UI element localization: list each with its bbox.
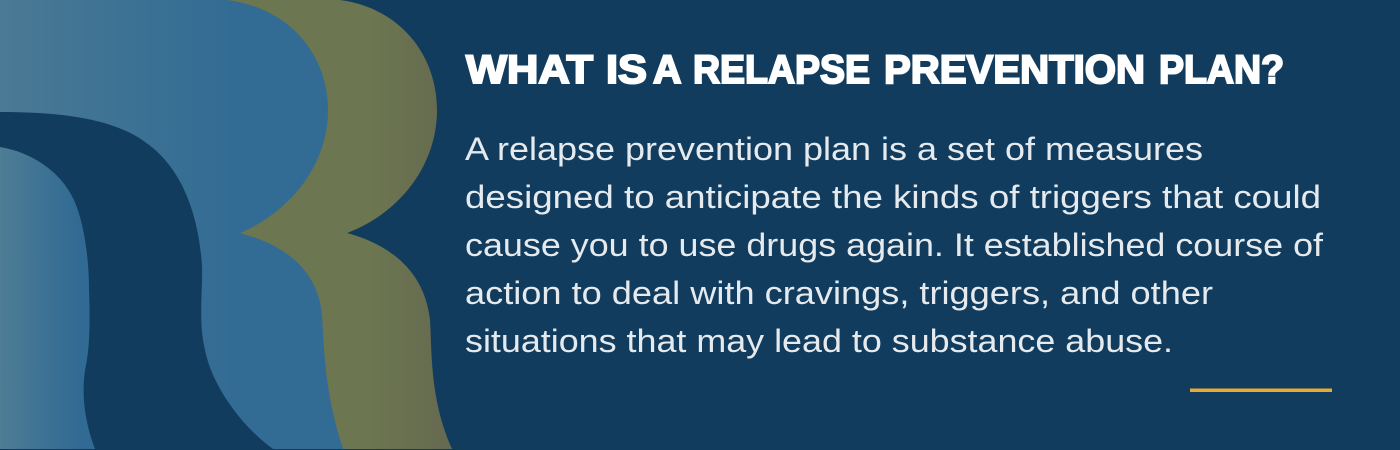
- title: RELAPSE: [693, 48, 870, 92]
- body text: [465, 131, 1323, 359]
- body text: designed to anticipate the kinds of triggers that could: [465, 179, 1321, 215]
- logo: blue main shape: [0, 0, 343, 449]
- title: WHAT: [466, 48, 593, 92]
- title: PREVENTION: [884, 48, 1145, 92]
- title: IS: [606, 48, 647, 92]
- title: A: [653, 48, 681, 92]
- logo graphic: stylised R: [0, 0, 452, 449]
- body text: situations that may lead to substance abuse.: [465, 323, 1173, 359]
- accent line: [1190, 388, 1332, 392]
- title: PLAN?: [1159, 48, 1284, 92]
- logo: olive outer band: [225, 0, 452, 449]
- body text: action to deal with cravings, triggers, and other: [465, 275, 1213, 311]
- logo: inner left blue shape: [0, 147, 95, 449]
- body text: cause you to use drugs again. It established course of: [465, 227, 1323, 263]
- body text: A relapse prevention plan is a set of measures: [465, 131, 1203, 167]
